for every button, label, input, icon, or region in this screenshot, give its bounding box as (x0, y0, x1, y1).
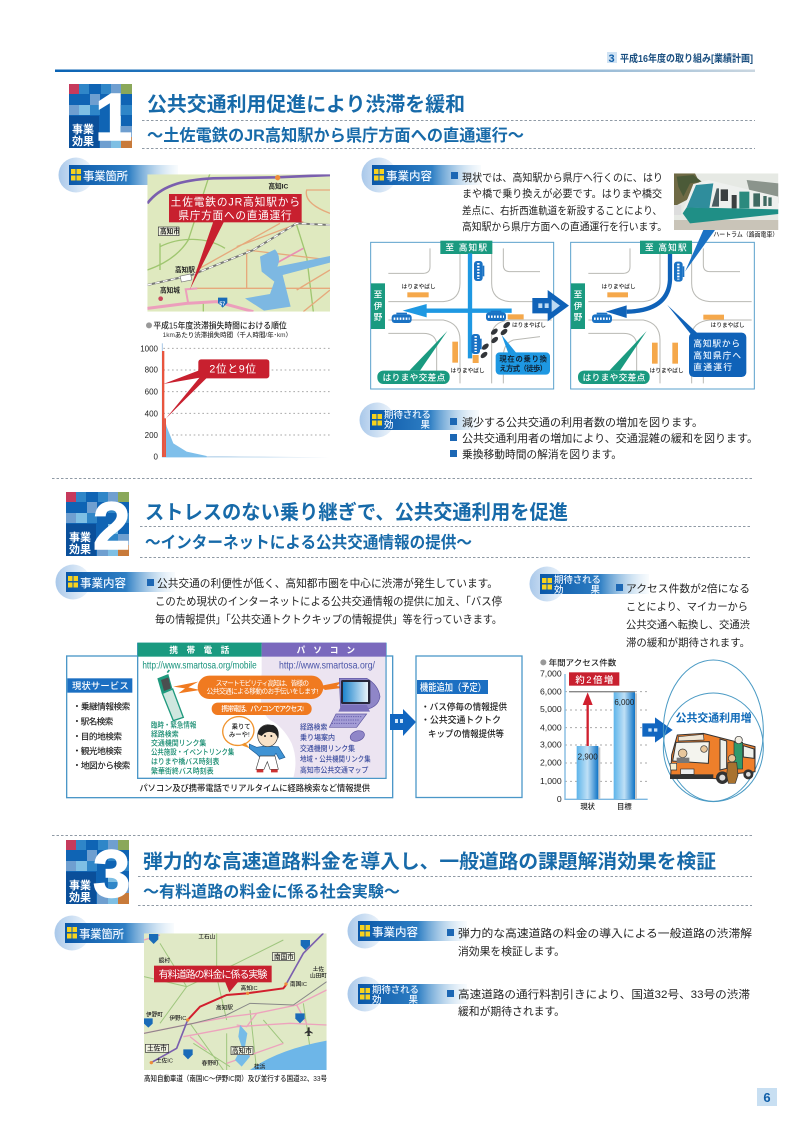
inner panel: 携帯電話 (169, 644, 230, 655)
access count bar chart: 7,000 (540, 669, 562, 679)
section 3 badge: 効果 (69, 891, 91, 904)
expected effects text: 乗換移動時間の解消を図ります。 (462, 447, 622, 461)
page number (757, 1088, 777, 1106)
new features box: ・公共交通トクトク (421, 714, 501, 725)
congestion ranking chart: 1000 (140, 344, 159, 353)
project description (447, 926, 752, 958)
access count bar chart: 目標 (617, 802, 632, 811)
expected effects text (447, 987, 750, 1018)
red callout (169, 194, 302, 289)
tab: project content (348, 914, 467, 948)
access count bar chart: 0 (557, 794, 562, 804)
signs (371, 241, 492, 329)
toll road map: 山田町 (310, 971, 327, 979)
tab: project location (58, 158, 178, 192)
toll road map: 春野町 (202, 1059, 219, 1067)
callout: Harimaya crossing (377, 331, 450, 384)
tab: expected effects: 期待される (372, 984, 419, 996)
running header: 平成16年度の取り組み[業績計画] (620, 52, 753, 65)
project description: 公共交通の利便性が低く、高知都市圏を中心に渋滞が発生しています。 (157, 576, 498, 590)
project description: 消効果を検証します。 (458, 944, 565, 958)
arrow to bus (642, 717, 673, 743)
chart caption: 平成15年度渋滞損失時間における順位 (153, 320, 287, 330)
stops (407, 292, 524, 363)
direct route arrow (606, 254, 670, 318)
new features box: キップの情報提供等 (428, 728, 504, 739)
project description: 毎の情報提供」「公共交通トクトクキップの情報提供」等を行っていきます。 (155, 612, 502, 626)
trams (592, 262, 684, 323)
new features box (416, 656, 522, 798)
bars (577, 692, 635, 799)
callout: direct service: 直通運行 (693, 361, 732, 372)
icon: computer (320, 678, 380, 743)
callout: Harimaya crossing: はりまや交差点 (383, 372, 446, 383)
tab: project location (54, 916, 174, 950)
diagram caption: パソコン及び携帯電話でリアルタイムに経路検索など情報提供 (139, 783, 371, 793)
project description: 現状では、高知駅から県庁へ行くのに、はり (462, 171, 663, 184)
toll road map: 南国IC (290, 980, 307, 988)
red growth arrow (569, 672, 619, 746)
callout: transfer on foot: え方式（徒歩） (499, 364, 547, 373)
section 3 badge (66, 837, 130, 912)
intersection diagram: planned: はりまやばし (602, 283, 636, 291)
current services list: ・乗継情報検索 (73, 700, 131, 711)
toll road map (144, 933, 327, 1070)
section 3 badge: 3 (93, 837, 130, 912)
signs: 至 (374, 289, 383, 299)
mobile services: 交通機関リンク集 (151, 737, 207, 747)
tram photo (674, 173, 778, 239)
red callout: 県庁方面への直通運行 (178, 209, 292, 222)
toll road map: 伊野町 (146, 1011, 163, 1019)
signs: 野 (574, 312, 583, 322)
intersection diagram: planned: はりまやばし (711, 321, 745, 329)
tab: project content (362, 158, 481, 192)
inner panel: http://www.smartosa.org/mobile (142, 660, 257, 671)
signs (571, 241, 692, 329)
congestion ranking chart: 200 (145, 431, 159, 440)
access count bar chart: 現状 (580, 802, 596, 811)
mobile services: 繁華街終バス時刻表 (151, 765, 214, 775)
project description (147, 576, 502, 626)
toll road map: 高知市 (232, 1046, 252, 1055)
callout: direct service: 高知県庁へ (693, 349, 741, 360)
access count bar chart: 6,000 (540, 686, 562, 696)
toll road map: 土佐IC (156, 1057, 173, 1065)
speech bubble (219, 713, 257, 749)
current services list: 現状サービス (72, 680, 129, 691)
section 1 badge: 効果 (72, 135, 94, 148)
current services list: ・目的地検索 (73, 730, 122, 741)
toll road map: 高知IC (241, 984, 258, 992)
congestion ranking chart (140, 320, 332, 462)
red callout: 土佐電鉄のJR高知駅から (171, 196, 300, 209)
PC services: 乗り場案内 (300, 732, 335, 742)
tab: expected effects: 効 果 (372, 994, 418, 1006)
callout: transfer on foot: 現在の乗り換 (499, 355, 548, 364)
expected effects text: ことにより、マイカーから (626, 601, 748, 613)
tab: expected effects: 効 果 (384, 419, 430, 431)
location map: 高知市 (160, 227, 180, 236)
intersection diagram: current: はりまやばし (402, 283, 436, 291)
callout: Harimaya crossing: はりまや交差点 (583, 372, 646, 383)
section 2 title: ストレスのない乗り継ぎで、公共交通利用を促進 (145, 500, 568, 524)
project description: 弾力的な高速道路の料金の導入による一般道路の渋滞解 (458, 926, 752, 940)
expected effects text: 公共交通利用者の増加により、交通混雑の緩和を図ります。 (462, 431, 758, 445)
tab: expected effects: 期待される (554, 574, 601, 586)
new features box: ・バス停毎の情報提供 (421, 701, 507, 712)
orange message: 携帯電話、パソコンでアクセス! (221, 704, 304, 713)
expected effects text: 滞の緩和が期待されます。 (626, 636, 750, 649)
section 3 badge: 事業 (69, 878, 91, 892)
page number: 6 (763, 1090, 771, 1105)
congestion ranking chart: 600 (145, 387, 159, 396)
signs: 伊 (374, 300, 383, 311)
chart caption (146, 320, 292, 339)
bars: 2,900 (578, 752, 598, 761)
callout: 2nd and 9th (163, 359, 269, 418)
tab: project content (56, 564, 175, 600)
signs: 至 (574, 289, 583, 299)
icon: bus (670, 733, 755, 784)
toll road map: 工石山 (198, 933, 216, 941)
location map: 高知IC (268, 182, 288, 191)
access count bar chart: 5,000 (540, 704, 562, 714)
new features box: 機能追加（予定） (420, 681, 486, 694)
PC services: 経路検索 (300, 721, 328, 731)
intersection diagram: current (371, 241, 554, 389)
mobile services: 経路検索 (151, 729, 179, 739)
section 2 subtitle: ～インターネットによる公共交通情報の提供～ (145, 533, 472, 552)
signs: 至 高知駅 (445, 242, 487, 253)
intersection diagram: current: はりまやばし (512, 321, 546, 329)
access count bar chart: 1,000 (540, 776, 562, 786)
tab: expected effects: 期待される (384, 409, 431, 421)
PC services: 地域・公共機関リンク集 (300, 754, 371, 764)
expected effects text: 緩和が期待されます。 (458, 1004, 565, 1018)
photo pointer (685, 230, 715, 272)
section 2 badge (66, 489, 130, 564)
trams (392, 261, 506, 354)
toll road map: 桂浜 (254, 1062, 266, 1070)
tab: project location: 事業箇所 (83, 169, 128, 183)
toll road map: 南国市 (274, 952, 294, 961)
bars: 6,000 (614, 698, 635, 707)
red callout (154, 966, 272, 992)
location map (147, 173, 330, 312)
section 3 (54, 837, 752, 1083)
tab: expected effects: 効 果 (554, 584, 600, 596)
section 3 title: 弾力的な高速道路料金を導入し、一般道路の課題解消効果を検証 (143, 850, 716, 873)
inner panel: http://www.smartosa.org/ (279, 660, 375, 671)
signs: 野 (374, 312, 383, 322)
congestion ranking chart: 800 (145, 366, 159, 375)
tab: expected effects (360, 402, 479, 438)
PC services: 高知市公共交通マップ (300, 765, 369, 775)
location map: 高知城 (160, 286, 180, 295)
access count bar chart: 公共交通利用増 (676, 712, 752, 725)
arrow to new features (390, 709, 416, 736)
callout: direct service: 高知駅から (693, 338, 740, 349)
expected effects text: 減少する公共交通の利用者数の増加を図ります。 (462, 415, 703, 429)
signs: 伊 (574, 300, 583, 311)
project description: 差点に、右折西進軌道を新設することにより、 (462, 204, 662, 217)
section 2 badge: 2 (93, 489, 130, 564)
chart caption: 1kmあたり渋滞損失時間（千人時間/年･km） (163, 330, 292, 339)
current services list: ・地図から検索 (73, 760, 131, 771)
section 1 subtitle: ～土佐電鉄のJR高知駅から県庁方面への直通運行～ (147, 125, 524, 145)
access count bar chart: 4,000 (540, 722, 562, 732)
icon: mobile phone (157, 670, 183, 721)
footsteps (479, 321, 511, 359)
section 1 badge: 1 (95, 80, 132, 155)
speech bubble: みーや! (229, 731, 250, 739)
congestion ranking chart: 0 (154, 453, 159, 462)
tab: project content: 事業内容 (386, 169, 432, 183)
access count bar chart: 2,000 (540, 758, 562, 768)
tab: project location: 事業箇所 (79, 927, 124, 941)
section 2 (56, 489, 763, 811)
tram photo: ハートラム（路面電車） (713, 230, 778, 239)
project description (451, 171, 667, 233)
access count bar chart (540, 657, 763, 811)
toll road map: 土佐市 (147, 1044, 167, 1053)
signs: 至 高知駅 (645, 242, 687, 253)
arrow between diagrams (532, 290, 569, 321)
current services list: ・観光地検索 (73, 745, 122, 756)
toll road map: 土佐 (313, 965, 324, 973)
section 1 (58, 80, 778, 462)
current services list (67, 678, 132, 771)
red callout: 有料道路の料金に係る実験 (159, 968, 267, 981)
toll road map: 高知駅 (216, 1003, 233, 1011)
expected effects text: 公共交通へ転換し、交通渋 (626, 618, 750, 631)
intersection diagram: planned: はりまやばし (650, 366, 684, 374)
section 2 badge: 事業 (69, 530, 91, 544)
mobile services: はりまや橋バス時刻表 (151, 756, 220, 766)
toll road map: 鏡村 (159, 957, 170, 965)
project description: このため現状のインターネットによる公共交通情報の提供に加え、「バス停 (155, 594, 502, 608)
section 1 title: 公共交通利用促進により渋滞を緩和 (147, 93, 465, 116)
tab: project content: 事業内容 (80, 576, 126, 590)
stops (607, 292, 724, 364)
inner panel: パソコン (297, 645, 355, 655)
current services list: ・駅名検索 (73, 715, 114, 726)
ridership ellipses (663, 660, 763, 802)
callout: direct service (667, 305, 746, 377)
orange message: スマートモビリティ高知は、皆様の (216, 679, 309, 688)
map caption: 高知自動車道（南国IC～伊野IC間）及び並行する国道32、33号 (144, 1073, 327, 1083)
orange message (173, 676, 323, 715)
location map: 高知駅 (175, 265, 195, 274)
mobile services: 臨時・緊急情報 (151, 720, 197, 730)
callout: Harimaya crossing (578, 331, 650, 384)
expected effects text: アクセス件数が2倍になる (626, 582, 750, 595)
section 1 badge: 事業 (72, 122, 94, 136)
PC services: 交通機関リンク集 (300, 743, 355, 753)
PC services (300, 721, 371, 775)
location map: 57 (219, 301, 225, 307)
service diagram (67, 643, 393, 798)
section 3 subtitle: ～有料道路の料金に係る社会実験～ (143, 882, 400, 901)
intersection diagram: current: はりまやばし (451, 366, 485, 374)
tab: expected effects (348, 976, 467, 1012)
speech bubble: 乗りて (232, 722, 251, 731)
expected effects text (450, 415, 758, 461)
callout: 2nd and 9th: 2位と9位 (209, 362, 256, 375)
project description: まや橋で乗り換えが必要です。はりまや橋交 (462, 187, 662, 200)
access count bar chart: 3,000 (540, 739, 562, 749)
section 2 badge: 効果 (69, 543, 91, 556)
icon: character (249, 725, 285, 772)
congestion ranking chart: 400 (145, 409, 159, 418)
callout: transfer on foot (496, 335, 550, 375)
inner panel (138, 643, 386, 778)
tab: expected effects (530, 566, 649, 602)
expected effects text (616, 582, 750, 649)
intersection diagram: planned (571, 230, 754, 389)
blue tram routes (403, 253, 512, 358)
section 1 badge (69, 80, 132, 155)
mobile services (151, 720, 235, 775)
red growth arrow: 約2倍増 (575, 674, 613, 685)
expected effects text: 高速道路の通行料割引きにより、国道32号、33号の渋滞 (458, 987, 750, 1001)
orange message: 公共交通による移動のお手伝いをします! (207, 687, 318, 696)
tab: project content: 事業内容 (372, 925, 418, 939)
project description: 高知駅から県庁方面への直通運行を行います。 (462, 220, 667, 233)
toll road map: 伊野IC (169, 1014, 186, 1022)
running header: 3 (608, 53, 615, 65)
chart title: 年間アクセス件数 (549, 657, 616, 667)
mobile services: 公共施設・イベントリンク集 (151, 747, 235, 757)
